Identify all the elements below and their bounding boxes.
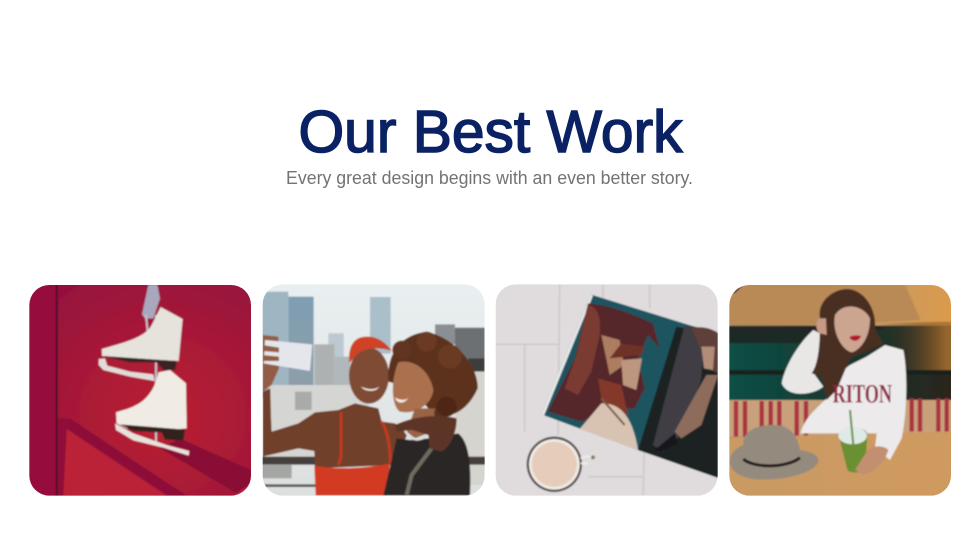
photo: hanging ice skates on red wall — [27, 282, 253, 498]
title: Our Best Work — [298, 99, 683, 165]
photo: two friends taking a selfie — [262, 282, 488, 498]
photo: woman in white sweatshirt at a cafe table: RITON — [833, 379, 892, 408]
photo: open fashion magazine and coffee cup — [495, 282, 721, 498]
subtitle: Every great design begins with an even better story. — [286, 168, 693, 188]
infographic slide — [29, 108, 951, 496]
photo: woman in white sweatshirt at a cafe table — [727, 282, 953, 498]
